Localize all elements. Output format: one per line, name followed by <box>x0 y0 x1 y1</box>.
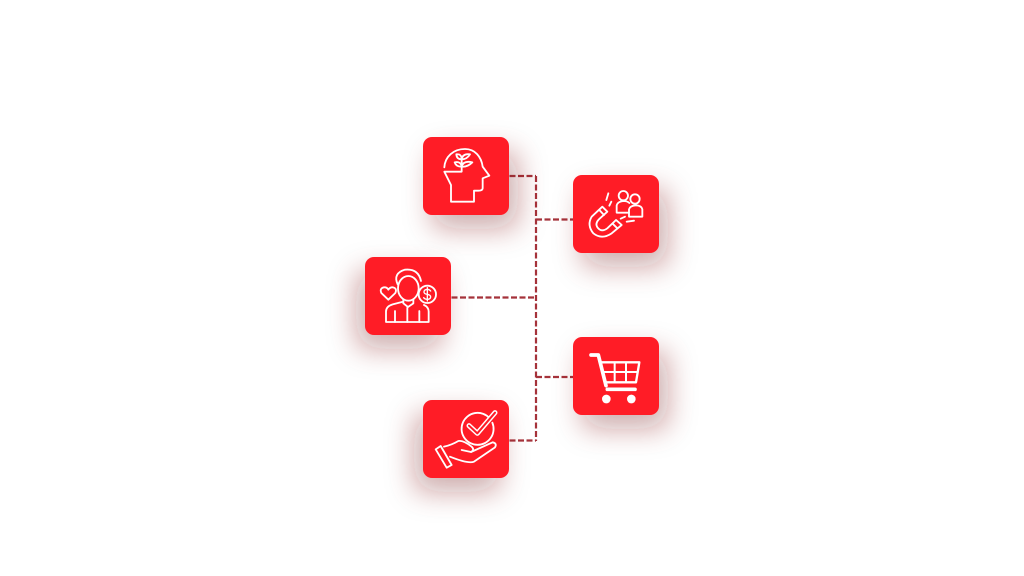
icon: hand and check mark <box>436 413 496 468</box>
dashed connectors <box>452 176 573 441</box>
tile: head with plant <box>423 137 509 215</box>
icon: person, heart and dollar <box>381 270 436 322</box>
tile: magnet attracting people <box>573 175 659 253</box>
tile: shopping cart <box>573 337 659 415</box>
icon: head with plant <box>444 149 489 202</box>
icon: shopping cart <box>591 355 639 403</box>
tile: person with heart and dollar <box>365 257 451 335</box>
tile: hand holding check mark <box>423 400 509 478</box>
icon: magnet and people <box>590 191 642 237</box>
